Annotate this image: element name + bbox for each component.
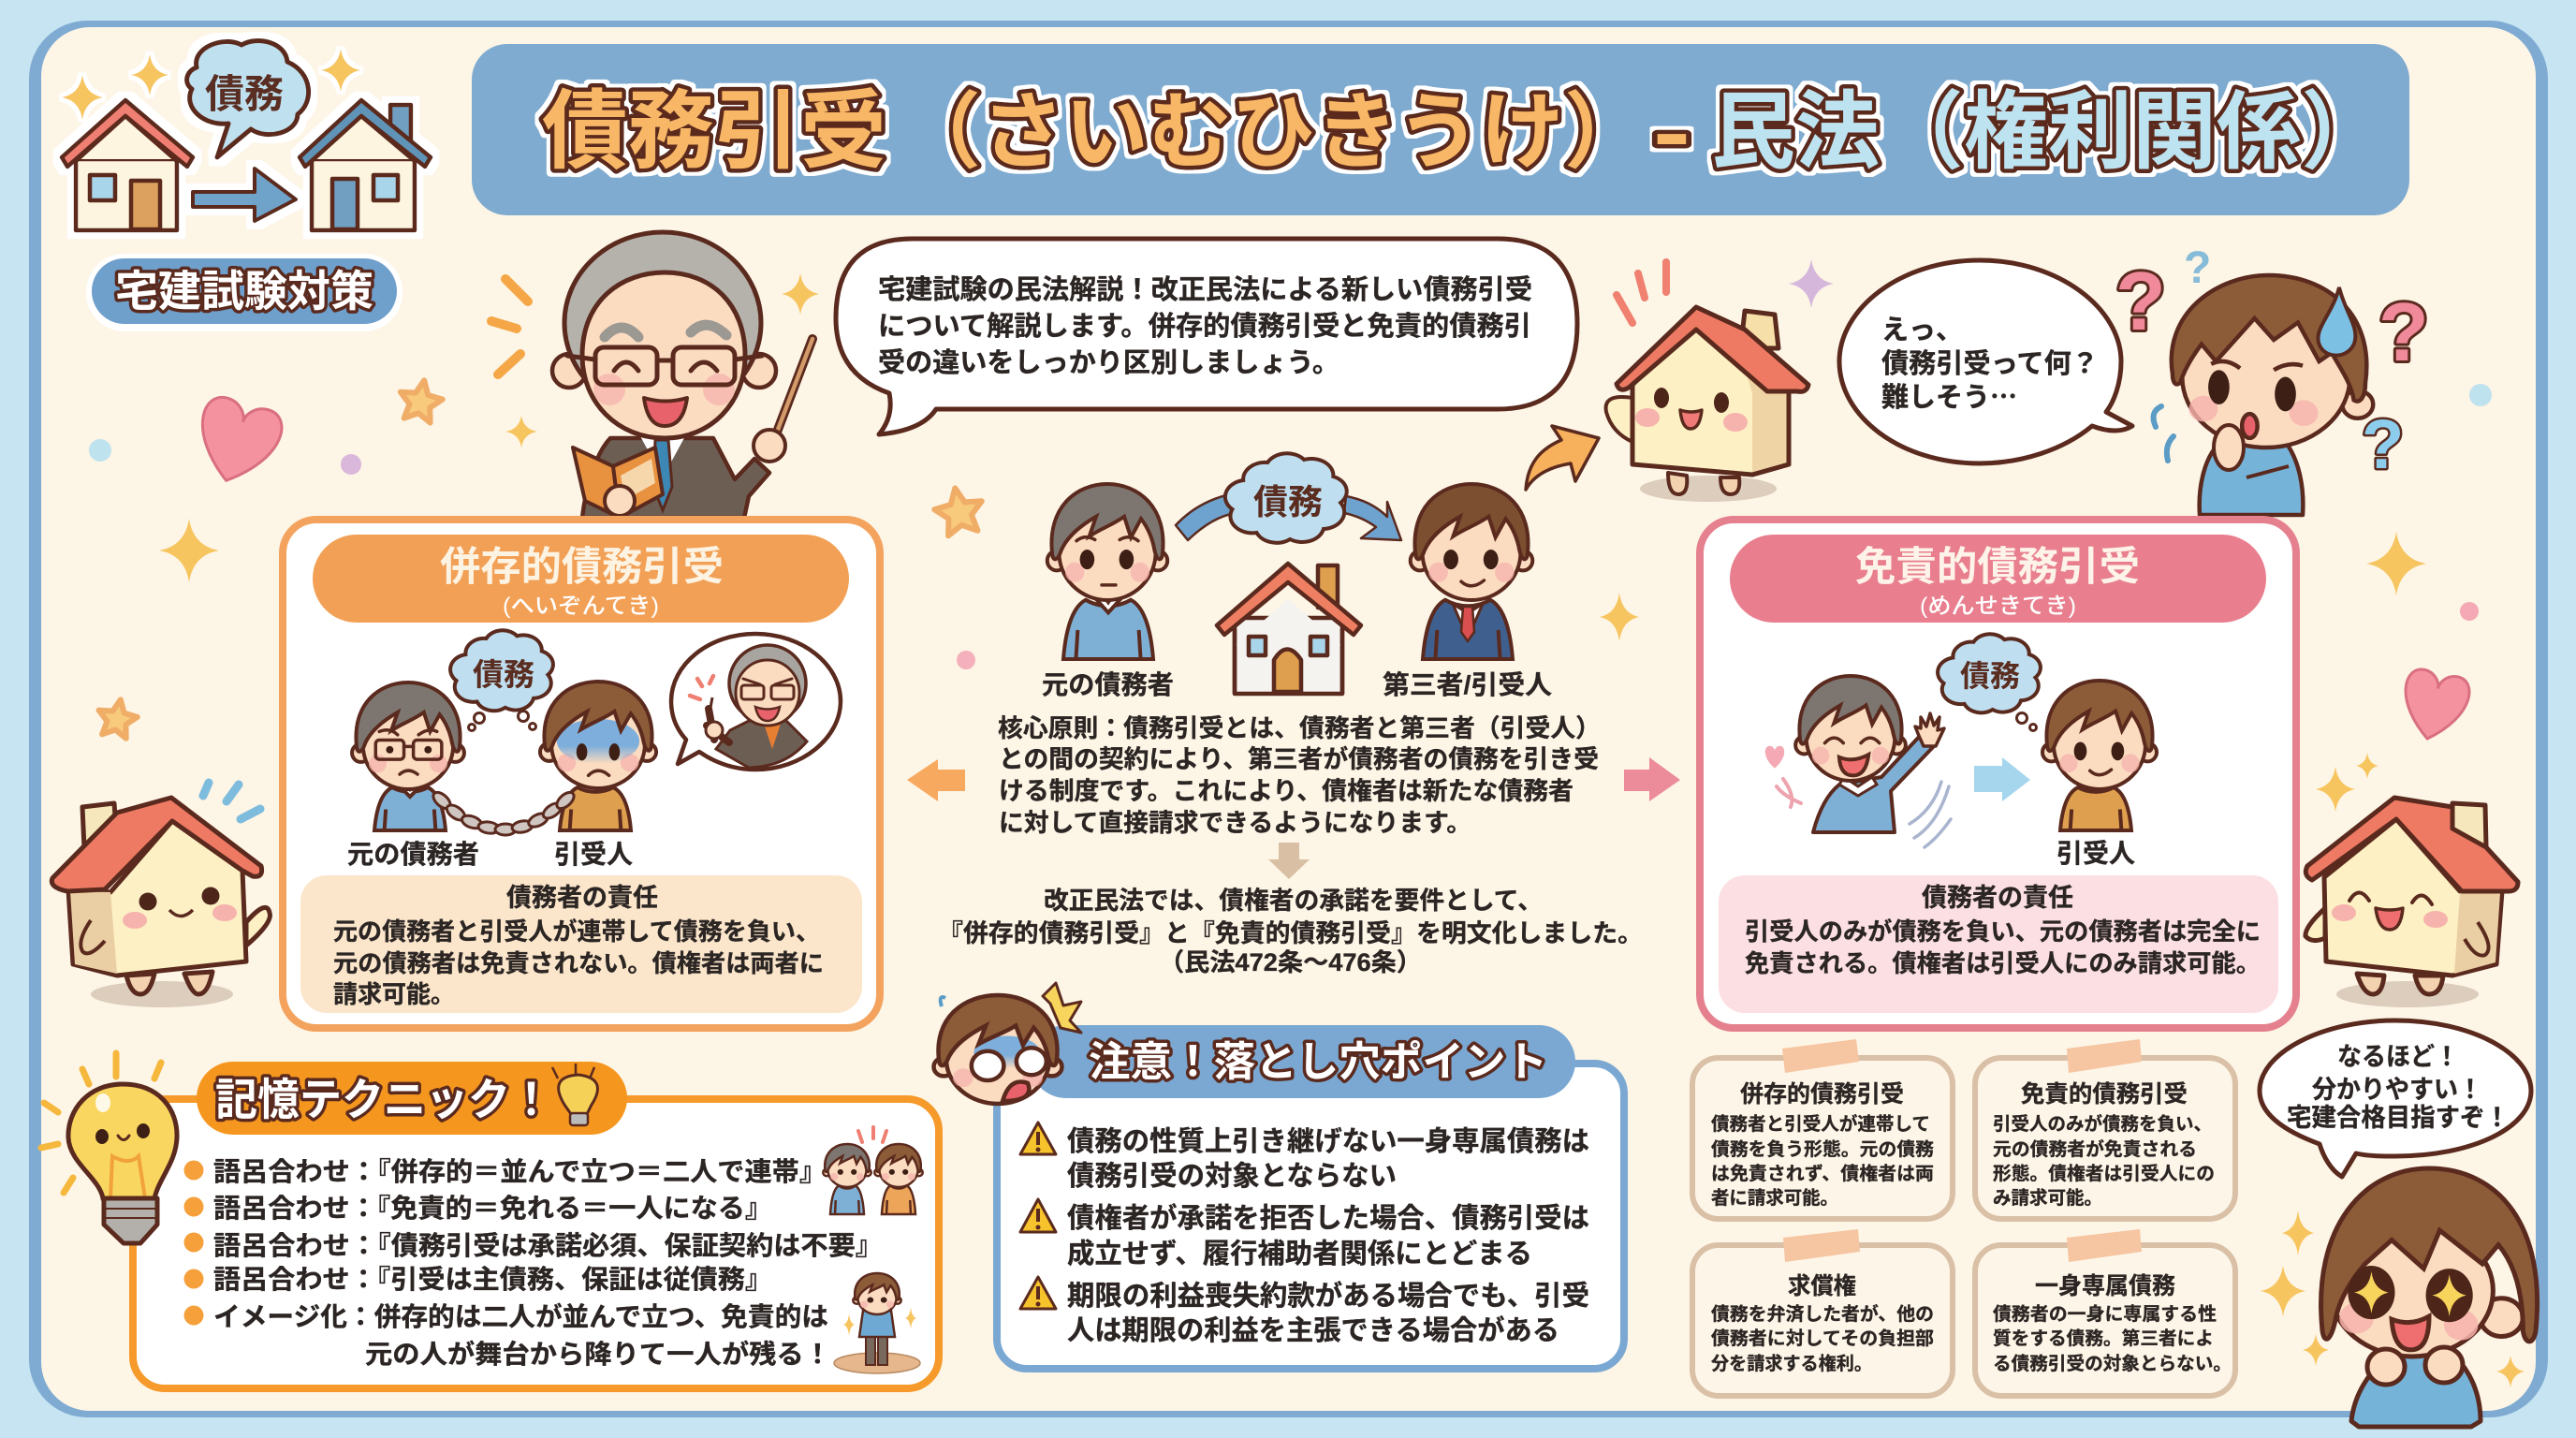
head — [552, 354, 586, 388]
text block: amended civil code: 『併存的債務引受』と『免責的債務引受』を明文化しました。 — [938, 919, 1643, 947]
question marks: ? — [2115, 255, 2166, 347]
badge: 宅建試験対策: 宅建試験対策 — [115, 267, 373, 315]
mini person on stage — [834, 1273, 920, 1373]
speech bubble: teacher: 宅建試験の民法解説！改正民法による新しい債務引受 — [878, 274, 1532, 305]
badge: 宅建試験対策 — [86, 254, 402, 331]
house character: top right — [1606, 262, 1808, 502]
sparkles — [2261, 1211, 2525, 1387]
panel header pill — [1730, 535, 2266, 623]
panel header pill: (へいぞんてき) — [503, 594, 659, 619]
speech bubble: learner understood — [2260, 1020, 2531, 1177]
warning list: 債務の性質上引き継げない一身専属債務は — [1067, 1126, 1589, 1157]
note card: 併存的債務引受 — [1692, 1039, 1953, 1219]
speech bubble: teacher: 受の違いをしっかり区別しましょう。 — [878, 347, 1339, 378]
responsibility box: 請求可能。 — [333, 980, 455, 1008]
panel header pill: 併存的債務引受 — [440, 545, 724, 590]
house — [1217, 564, 1361, 694]
note card: 求償権: 債務を弁済した者が、他の — [1711, 1303, 1934, 1325]
icon: debt speech cloud: 債務 — [205, 72, 284, 116]
chain — [431, 789, 577, 835]
panel header pill — [313, 535, 849, 623]
happy boy character — [2261, 1168, 2538, 1427]
body — [2351, 1354, 2481, 1427]
note card: 求償権: 求償権 — [1788, 1273, 1856, 1299]
text block: core principle: ける制度です。これにより、債権者は新たな債務者 — [999, 777, 1573, 805]
icon: left house — [62, 100, 193, 230]
panel: pitfall points: 期限の利益喪失約款がある場合でも、引受 — [1067, 1280, 1589, 1312]
note card: 免責的債務引受: み請求可能。 — [1993, 1187, 2102, 1209]
note card: 免責的債務引受: 引受人のみが債務を負い、 — [1993, 1113, 2212, 1135]
bullet list: 元の人が舞台から降りて一人が残る！ — [365, 1339, 831, 1369]
mini two people — [823, 1127, 923, 1214]
assignee — [2042, 681, 2157, 830]
note card: 一身専属債務 — [1975, 1229, 2235, 1396]
responsibility box — [1719, 875, 2278, 1013]
icon: transfer arrow — [193, 169, 296, 221]
bullet list: 語呂合わせ：『債務引受は承諾必須、保証契約は不要』 — [213, 1231, 883, 1260]
responsibility box: 引受人のみが債務を負い、元の債務者は完全に — [1745, 917, 2261, 946]
text block: amended civil code: （民法472条～476条） — [1159, 948, 1422, 976]
confused boy character — [2115, 243, 2429, 515]
thought cloud: 債務 — [473, 657, 534, 692]
text block: core principle: 核心原則：債務引受とは、債務者と第三者（引受人） — [998, 714, 1601, 742]
text block: amended civil code: 改正民法では、債権者の承諾を要件として、 — [1044, 887, 1543, 915]
debt cloud — [1225, 453, 1347, 543]
note card: 求償権 — [1692, 1229, 1953, 1396]
note card: 一身専属債務: 質をする債務。第三者によ — [1993, 1328, 2214, 1349]
thought cloud: 債務 — [1960, 659, 2020, 693]
original debtor — [1047, 484, 1167, 659]
responsibility box: 債務者の責任 — [1922, 884, 2073, 912]
suit — [582, 438, 769, 518]
center diagram: debt transfer: 第三者/引受人 — [1383, 670, 1552, 699]
responsibility box: 元の債務者は免責されない。債権者は両者に — [333, 949, 824, 977]
header pill — [197, 1062, 627, 1135]
original debtor illustration — [352, 682, 464, 830]
labels: 元の債務者 — [1042, 670, 1174, 699]
icon: warning triangles — [1020, 1123, 1056, 1309]
speech bubble: learner understood: 分かりやすい！ — [2312, 1076, 2482, 1104]
decor: hearts, stars, sparkles, dots — [89, 259, 2492, 812]
panel: pitfall points: 債権者が承諾を拒否した場合、債務引受は — [1067, 1202, 1589, 1234]
arrow: down — [1268, 843, 1310, 879]
panel: memory technique — [41, 1053, 939, 1388]
title: blue part: 民法（権利関係） — [1711, 85, 2385, 180]
header pill: 注意！落とし穴ポイント — [1089, 1039, 1547, 1085]
header pill: 記憶テクニック！ — [215, 1075, 552, 1124]
surprised face — [934, 983, 1081, 1104]
confused boy character: ? — [2362, 405, 2404, 483]
text block: core principle: に対して直接請求できるようになります。 — [999, 809, 1471, 837]
arrow: orange curved to house — [1526, 426, 1599, 490]
debt cloud: 債務 — [1253, 483, 1323, 521]
panel: pitfall points: 人は期限の利益を主張できる場合がある — [1067, 1314, 1559, 1346]
bullet list — [183, 1157, 883, 1369]
note card: 併存的債務引受: 債務を負う形態。元の債務 — [1711, 1138, 1934, 1160]
blue arrow — [1974, 757, 2030, 801]
panel: pitfall points: 成立せず、履行補助者関係にとどまる — [1067, 1239, 1532, 1269]
speech bubble: teacher: について解説します。併存的債務引受と免責的債務引 — [878, 311, 1531, 342]
transfer arrows — [1176, 493, 1401, 540]
speech bubble: confused learner: 債務引受って何？ — [1881, 348, 2099, 379]
responsibility box: 免責される。債権者は引受人にのみ請求可能。 — [1745, 949, 2261, 977]
speech bubble: learner understood: なるほど！ — [2337, 1043, 2459, 1071]
note card: 免責的債務引受: 元の債務者が免責される — [1993, 1138, 2197, 1160]
open book — [573, 448, 663, 518]
thought cloud — [1938, 634, 2041, 730]
responsibility box: 元の債務者と引受人が連帯して債務を負い、 — [333, 917, 820, 946]
bullet list: 語呂合わせ：『免責的＝免れる＝一人になる』 — [213, 1194, 772, 1223]
confused boy character: ? — [2378, 286, 2429, 378]
assignee in suit — [1411, 484, 1532, 659]
hands — [2367, 1347, 2463, 1385]
sparkles — [62, 49, 360, 120]
speech bubble: confused learner — [1839, 260, 2132, 463]
head — [2321, 1168, 2538, 1357]
note card: 併存的債務引受: 者に請求可能。 — [1711, 1187, 1838, 1209]
body — [2200, 440, 2303, 515]
note card: 一身専属債務: 債務者の一身に専属する性 — [1993, 1304, 2217, 1325]
center diagram: debt transfer — [1042, 453, 1552, 699]
arrow: right to 免責的 — [1624, 757, 1680, 801]
icon: debt speech cloud — [187, 41, 309, 157]
panel: pitfall points: 債務引受の対象とならない — [1067, 1161, 1397, 1192]
panel: pitfall points — [934, 983, 1624, 1369]
title: kanji: 債務引受 — [542, 84, 886, 180]
note card: 免責的債務引受 — [1975, 1039, 2235, 1219]
panel: 併存的債務引受 — [283, 520, 880, 1028]
panel header pill: (めんせきてき) — [1920, 594, 2076, 619]
head — [2172, 275, 2373, 448]
note card: 併存的債務引受: 債務者と引受人が連帯して — [1711, 1113, 1930, 1135]
hand on chin — [2214, 425, 2244, 470]
bullet list: イメージ化：併存的は二人が並んで立つ、免責的は — [213, 1301, 828, 1331]
note card: 一身専属債務: る債務引受の対象とらない。 — [1993, 1353, 2232, 1374]
bullet list: 語呂合わせ：『引受は主債務、保証は従債務』 — [213, 1265, 772, 1294]
confused boy character: ? — [2184, 243, 2211, 293]
note card: 併存的債務引受: 併存的債務引受 — [1740, 1081, 1904, 1108]
panel: 免責的債務引受 — [1700, 520, 2296, 1028]
assignee label: 引受人 — [2056, 839, 2135, 868]
speech bubble: confused learner: 難しそう… — [1881, 375, 2017, 415]
note card: 免責的債務引受: 形態。債権者は引受人にの — [1993, 1163, 2215, 1184]
mini teacher bubble — [671, 634, 841, 770]
title: reading: （さいむひきうけ） — [898, 85, 1647, 179]
icon: mini lightbulb — [552, 1064, 597, 1125]
title banner — [472, 44, 2409, 215]
arrow: left to 併存的 — [907, 759, 965, 801]
sweat drop — [2318, 287, 2355, 356]
logo: two houses and debt cloud — [62, 41, 431, 230]
header pill — [1030, 1025, 1575, 1098]
waving original debtor — [1765, 676, 1951, 847]
note card: 一身専属債務: 一身専属債務 — [2035, 1273, 2175, 1299]
text block: core principle — [998, 714, 1601, 837]
text block: amended civil code — [938, 887, 1643, 976]
panel: 併存的債務引受: 引受人 — [554, 840, 633, 869]
icon: right house — [300, 100, 431, 230]
panel header pill: 免責的債務引受 — [1855, 545, 2140, 590]
note card: 免責的債務引受: 免責的債務引受 — [2021, 1081, 2188, 1108]
responsibility box — [300, 875, 862, 1013]
text block: core principle: との間の契約により、第三者が債務者の債務を引き受 — [999, 745, 1599, 773]
motion lines — [491, 279, 528, 374]
icon: smiling bulb character — [41, 1053, 177, 1243]
note card: 求償権: 債務者に対してその負担部 — [1711, 1328, 1934, 1349]
bullet list: 語呂合わせ：『併存的＝並んで立つ＝二人で連帯』 — [213, 1157, 827, 1186]
note card: 求償権: 分を請求する権利。 — [1711, 1353, 1872, 1374]
note card: 併存的債務引受: は免責されず、債権者は両 — [1711, 1163, 1934, 1184]
house character: left — [51, 783, 270, 1007]
thought cloud — [450, 630, 553, 730]
person labels: 元の債務者 — [347, 840, 479, 869]
title: hyphen: - — [1653, 85, 1690, 180]
speech bubble: learner understood: 宅建合格目指すぞ！ — [2287, 1104, 2510, 1132]
teacher character — [491, 232, 812, 518]
assignee illustration — [540, 682, 656, 830]
pointer stick — [773, 339, 812, 442]
speech bubble: confused learner: えっ、 — [1881, 315, 1963, 345]
responsibility box: 債務者の責任 — [506, 884, 658, 912]
speech bubble: teacher — [836, 239, 1577, 434]
house character: right — [2305, 798, 2518, 1007]
